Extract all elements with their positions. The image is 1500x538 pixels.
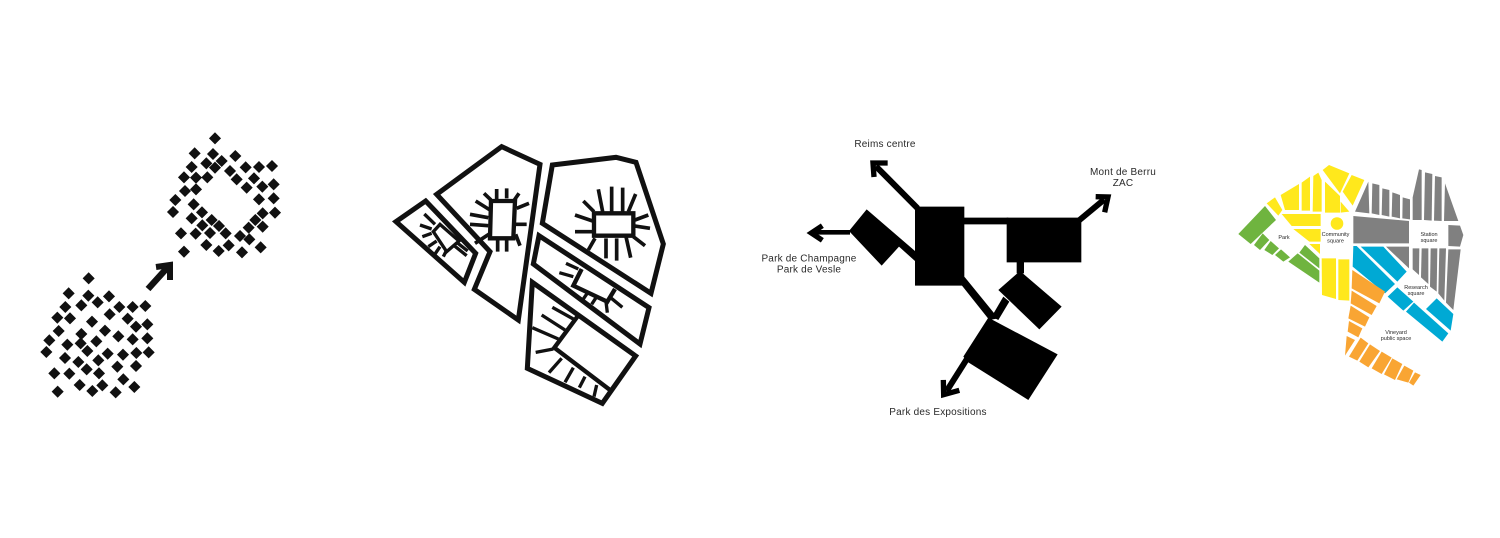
arrow: to Reims centre: [873, 163, 918, 208]
label: Vineyard public space: Vineyard: [1385, 330, 1407, 336]
yellow community plots: [1267, 165, 1364, 301]
panel: coloured land-use plan: [1238, 165, 1463, 386]
label: Station square: square: [1421, 238, 1437, 244]
block: west wedge with building: [437, 147, 540, 320]
label: Community square: Community: [1322, 232, 1349, 238]
label: Park de Champagne, Park de Vesle: Park de Champagne: [761, 254, 857, 264]
label: Station square: Station: [1420, 232, 1438, 238]
label: Park de Champagne, Park de Vesle: Park de Vesle: [777, 264, 841, 276]
panel: settlement dispersal diagram: [41, 133, 280, 398]
upper diamond cluster: [168, 133, 280, 258]
orange vineyard plots: [1345, 270, 1421, 386]
black building masses: [849, 207, 1081, 400]
label: Research square: square: [1408, 291, 1424, 297]
label: Mont de Berru ZAC: ZAC: [1113, 178, 1133, 189]
grey station plots: [1353, 169, 1463, 310]
arrow: to Mont de Berru: [1078, 197, 1108, 221]
label: Community square: square: [1327, 238, 1344, 244]
arrow: dispersal direction: [148, 265, 170, 289]
label: Park: Park: [1278, 235, 1290, 241]
block: north-east with building: [542, 157, 663, 293]
lower diamond cluster: [41, 273, 154, 398]
arrow: to Park des Expositions: [943, 358, 967, 395]
label: Park des Expositions: Park des Expositions: [889, 407, 987, 418]
block: middle strip with building: [533, 236, 649, 344]
panel: block outline plan: [396, 147, 663, 403]
arrow: to Park de Champagne: [811, 226, 850, 240]
icon: community square circle: [1331, 217, 1343, 230]
label: Research square: Research: [1404, 285, 1428, 291]
panel: connections diagram: [761, 139, 1156, 418]
block: south with building: [527, 282, 636, 403]
label: Mont de Berru ZAC: Mont de Berru: [1090, 167, 1156, 178]
green park plots: [1238, 206, 1319, 283]
blue research plots: [1353, 246, 1453, 342]
label: Reims centre: Reims centre: [854, 139, 916, 150]
block: small west strip with building: [396, 201, 476, 282]
label: Vineyard public space: public space: [1381, 336, 1411, 342]
